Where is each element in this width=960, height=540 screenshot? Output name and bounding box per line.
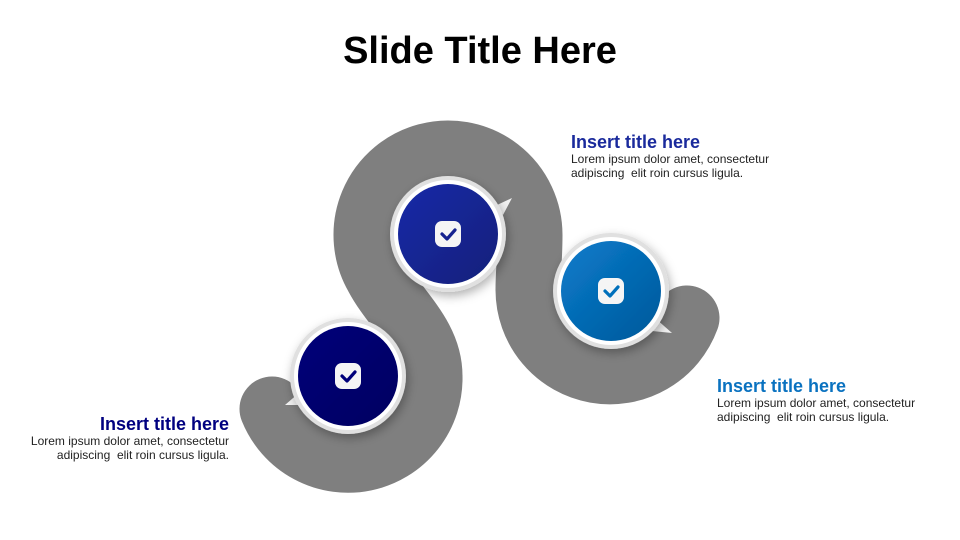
- text block: top right: adipiscing elit roin cursus ligula.: [571, 166, 743, 180]
- text block: bottom right: Lorem ipsum dolor amet, consectetur: [717, 396, 915, 410]
- text block: bottom left: adipiscing elit roin cursus ligula.: [57, 448, 229, 462]
- text block: bottom right: Insert title here: [717, 376, 846, 396]
- title: Slide Title Here: [343, 30, 617, 72]
- text block: bottom left: Insert title here: [100, 414, 229, 434]
- circle 3: [553, 233, 669, 349]
- text block: top right: [571, 132, 769, 180]
- circle 1: [290, 318, 406, 434]
- text block: bottom right: adipiscing elit roin cursus ligula.: [717, 410, 889, 424]
- icon: check 1: [335, 363, 361, 389]
- text block: bottom left: [31, 414, 229, 462]
- icon: check 3: [598, 278, 624, 304]
- text block: top right: Insert title here: [571, 132, 700, 152]
- pointer triangles: [285, 198, 672, 405]
- text block: bottom left: Lorem ipsum dolor amet, consectetur: [31, 434, 229, 448]
- grey S path: [272, 153, 687, 460]
- circle 2: [390, 176, 506, 292]
- text block: bottom right: [717, 376, 915, 424]
- icon: check 2: [435, 221, 461, 247]
- text block: top right: Lorem ipsum dolor amet, consectetur: [571, 152, 769, 166]
